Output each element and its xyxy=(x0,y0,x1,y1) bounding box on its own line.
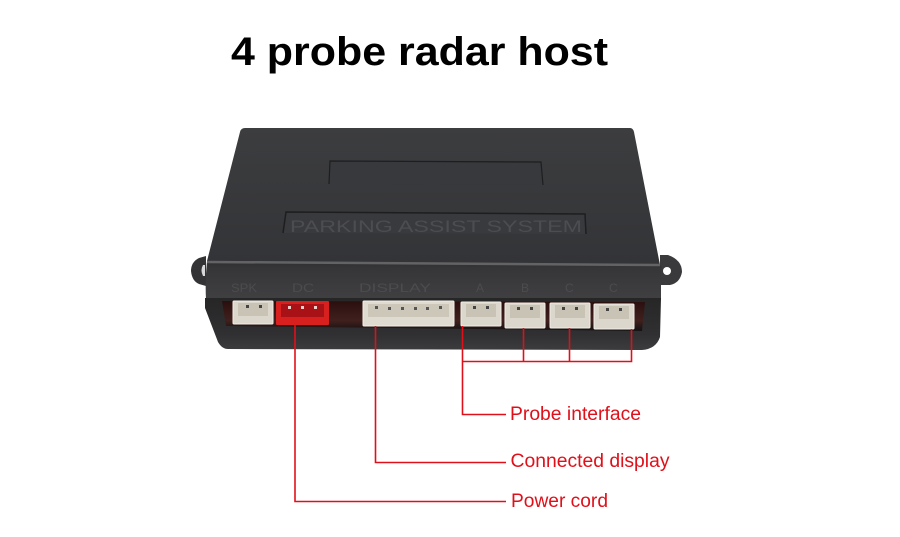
right mounting ear xyxy=(660,255,682,285)
radar host box xyxy=(191,128,682,350)
title: 4 probe radar host xyxy=(231,30,608,74)
front upper face xyxy=(206,261,662,300)
left mounting ear xyxy=(191,256,206,286)
port labels: C xyxy=(609,281,618,295)
connector: D xyxy=(594,304,634,329)
label: connected display: Connected display xyxy=(510,451,670,472)
port labels: C xyxy=(565,281,574,295)
port labels: B xyxy=(521,281,529,295)
label: probe interface: Probe interface xyxy=(510,404,641,425)
connector: A xyxy=(461,302,501,326)
top face xyxy=(207,128,660,265)
connector: B xyxy=(505,303,545,328)
connector: DISPLAY xyxy=(363,301,454,326)
front lower face xyxy=(205,298,661,350)
connector: C xyxy=(550,303,590,328)
port labels: DC xyxy=(292,281,314,295)
label: power cord: Power cord xyxy=(511,491,608,512)
embossed panel with system name xyxy=(283,212,586,236)
connector slot xyxy=(222,301,645,331)
port labels: SPK xyxy=(231,281,257,295)
port labels xyxy=(231,281,618,295)
top recessed label area xyxy=(329,161,543,185)
leader line: power cord xyxy=(295,325,506,502)
port labels: DISPLAY xyxy=(359,281,431,295)
connector: DC red xyxy=(276,301,329,325)
embossed panel with system name: PARKING ASSIST SYSTEM xyxy=(290,217,582,236)
leader line: connected display xyxy=(376,326,506,462)
leader lines: probe interface xyxy=(462,326,632,414)
connector: SPK xyxy=(233,301,273,324)
port labels: A xyxy=(476,281,484,295)
